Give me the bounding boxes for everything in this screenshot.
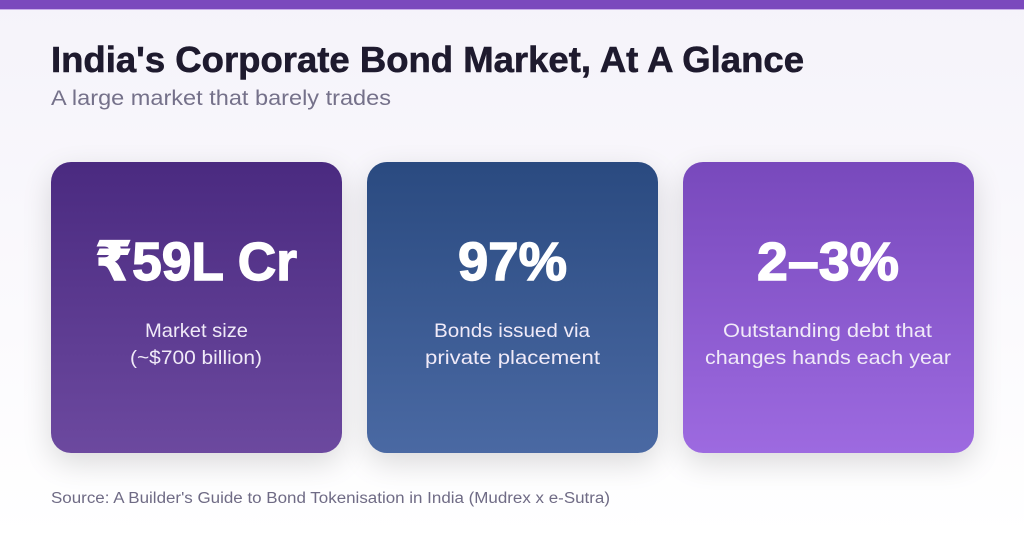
subtitle: A large market that barely trades [51, 86, 391, 110]
panel: private placement [367, 162, 658, 453]
description: private placement: Bonds issued via [434, 320, 590, 342]
description: private placement: private placement [425, 347, 601, 369]
description: private placement [425, 320, 601, 369]
title: India's Corporate Bond Market, At A Glance [51, 39, 804, 80]
description: turnover: Outstanding debt that [723, 320, 933, 342]
stat: 2-3%: 2–3% [757, 232, 899, 292]
description: market size: (~$700 billion) [130, 347, 262, 369]
description: market size: Market size [145, 320, 248, 342]
description: market size [130, 320, 262, 369]
panel: turnover [683, 162, 974, 453]
panel: market size [51, 162, 342, 453]
top accent bar [0, 0, 1024, 10]
stat: 59L Cr: ₹59L Cr [95, 232, 297, 292]
stat: 97%: 97% [458, 232, 567, 292]
description: turnover: changes hands each year [705, 347, 952, 369]
source note: Source: A Builder's Guide to Bond Tokenisation in India (Mudrex x e-Sutra) [51, 490, 610, 507]
description: turnover [705, 320, 952, 369]
